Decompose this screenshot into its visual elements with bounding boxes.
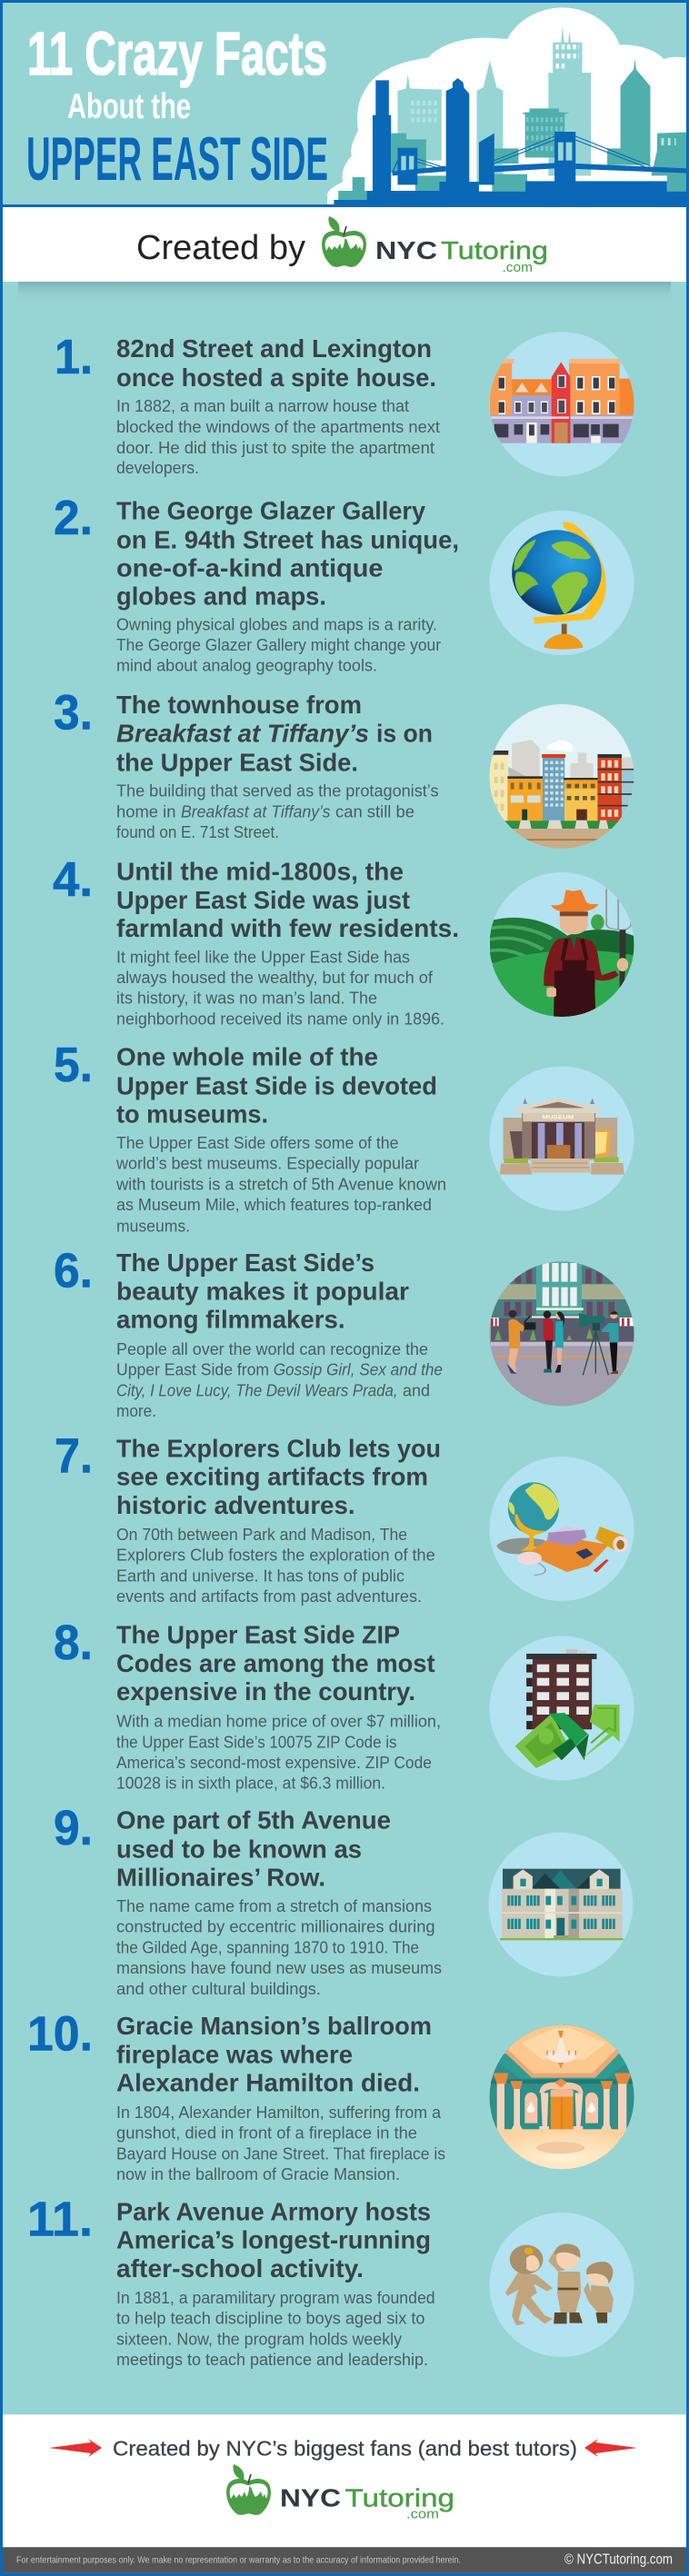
heading: to museums. bbox=[116, 1100, 268, 1129]
heading: America’s longest-running bbox=[116, 2225, 431, 2253]
heading: after-school activity. bbox=[116, 2254, 364, 2283]
heading bbox=[116, 857, 459, 942]
body text: The building that served as the protagonist’s bbox=[116, 781, 438, 801]
icon: building and money bbox=[489, 1636, 634, 1781]
body text bbox=[116, 947, 444, 1028]
heading bbox=[116, 1806, 391, 1892]
heading: historic adventures. bbox=[116, 1491, 355, 1519]
band shadow bbox=[18, 282, 671, 303]
heading: Breakfast at Tiffany’s bbox=[116, 720, 369, 748]
heading: on E. 94th Street has unique, bbox=[116, 525, 459, 553]
body text: museums. bbox=[116, 1216, 190, 1235]
body text: People all over the world can recognize the bbox=[116, 1339, 428, 1358]
fact 3 bbox=[54, 686, 634, 850]
title: Upper East Side: UPPER EAST SIDE bbox=[26, 124, 328, 194]
body text bbox=[116, 2103, 445, 2183]
logo wordmark: NYC bbox=[375, 236, 437, 264]
body text: blocked the windows of the apartments next bbox=[116, 417, 441, 436]
heading: expensive in the country. bbox=[116, 1677, 415, 1706]
heading: the Upper East Side. bbox=[116, 748, 358, 776]
body text: City, I Love Lucy, The Devil Wears Prada, bbox=[116, 1380, 398, 1399]
fact 1 bbox=[55, 330, 634, 477]
heading bbox=[116, 1620, 435, 1706]
body text: Gossip Girl, Sex and the bbox=[274, 1360, 443, 1379]
body text: It might feel like the Upper East Side has bbox=[116, 947, 410, 966]
number 3: 3. bbox=[54, 686, 93, 741]
heading: is on bbox=[376, 720, 433, 748]
heading bbox=[116, 2012, 432, 2097]
body text: neighborhood received its name only in 1896. bbox=[116, 1009, 444, 1028]
heading: Codes are among the most bbox=[116, 1649, 435, 1677]
body text: mind about analog geography tools. bbox=[116, 656, 377, 675]
body text bbox=[116, 614, 441, 675]
number 2: 2. bbox=[54, 491, 93, 545]
icon: farmer bbox=[489, 872, 634, 1018]
fact 4 bbox=[53, 852, 634, 1028]
body text: Earth and universe. It has tons of public bbox=[116, 1566, 404, 1585]
copyright: © NYCTutoring.com bbox=[564, 2552, 673, 2568]
icon: museum: MUSEUM bbox=[543, 1113, 574, 1120]
heading: Upper East Side is devoted bbox=[116, 1071, 437, 1099]
heading: one-of-a-kind antique bbox=[116, 553, 384, 582]
icon: brownstones bbox=[489, 704, 634, 850]
body text: Bayard House on Jane Street. That fireplace is bbox=[116, 2143, 445, 2163]
body text: Upper East Side from bbox=[116, 1360, 269, 1379]
heading bbox=[116, 2197, 431, 2283]
heading bbox=[116, 1434, 441, 1519]
footer tagline: Created by NYC’s biggest fans (and best tutors) bbox=[113, 2437, 577, 2461]
body text: as Museum Mile, which features top-ranked bbox=[116, 1195, 432, 1214]
logo wordmark: Tutoring bbox=[441, 236, 548, 264]
heading: farmland with few residents. bbox=[116, 914, 459, 942]
body text: The George Glazer Gallery might change your bbox=[116, 635, 441, 654]
body text: Breakfast at Tiffany’s bbox=[181, 801, 331, 821]
body text: always housed the wealthy, but for much of bbox=[116, 968, 434, 987]
number 4: 4. bbox=[53, 852, 93, 907]
fact 11 bbox=[27, 2193, 634, 2369]
heading: see exciting artifacts from bbox=[116, 1462, 428, 1490]
heading: One part of 5th Avenue bbox=[116, 1806, 391, 1835]
icon: ballroom bbox=[489, 2022, 636, 2176]
heading: Gracie Mansion’s ballroom bbox=[116, 2012, 432, 2040]
body text: and bbox=[403, 1380, 430, 1399]
body text: gunshot, died in front of a fireplace in the bbox=[116, 2123, 417, 2143]
body text: can still be bbox=[335, 801, 414, 821]
fact 10 bbox=[27, 2007, 636, 2183]
number 8: 8. bbox=[54, 1616, 93, 1670]
number 11: 11. bbox=[27, 2193, 93, 2247]
body text bbox=[116, 1712, 441, 1793]
body text: With a median home price of over $7 million, bbox=[116, 1712, 441, 1731]
title: 11 Crazy Facts: 11 Crazy Facts bbox=[27, 20, 327, 88]
heading: Upper East Side was just bbox=[116, 886, 410, 914]
footer logo wordmark bbox=[280, 2483, 454, 2522]
number 1: 1. bbox=[55, 330, 93, 384]
logo wordmark bbox=[375, 236, 548, 275]
body text bbox=[116, 2288, 435, 2369]
footer panel bbox=[3, 2414, 686, 2547]
heading bbox=[116, 334, 436, 392]
number 6: 6. bbox=[54, 1244, 93, 1298]
body text bbox=[116, 1339, 443, 1420]
icon: cadets bbox=[489, 2213, 634, 2357]
number 9: 9. bbox=[54, 1801, 93, 1855]
number 5: 5. bbox=[54, 1038, 93, 1092]
created by text: Created by bbox=[136, 229, 305, 267]
body text: with tourists is a stretch of 5th Avenue known bbox=[115, 1174, 446, 1193]
footer logo wordmark: NYC bbox=[280, 2483, 341, 2511]
body text bbox=[116, 396, 441, 477]
disclaimer text: For entertainment purposes only. We make no representation or warranty as to the accuracy of information provided herein. bbox=[16, 2555, 461, 2566]
body text: the Gilded Age, spanning 1870 to 1910. The bbox=[116, 1937, 419, 1956]
heading: Alexander Hamilton died. bbox=[116, 2069, 420, 2097]
body text: Explorers Club fosters the exploration of the bbox=[116, 1546, 435, 1565]
icon: apple logo bbox=[322, 216, 366, 267]
heading: Millionaires’ Row. bbox=[116, 1864, 325, 1892]
header banner bbox=[0, 0, 689, 207]
body text: to help teach discipline to boys aged six to bbox=[116, 2309, 425, 2328]
body text: developers. bbox=[116, 458, 199, 477]
icon: museum bbox=[489, 1067, 634, 1210]
body text: the Upper East Side’s 10075 ZIP Code is bbox=[116, 1732, 396, 1751]
disclaimer bar bbox=[0, 2547, 689, 2576]
top border bbox=[0, 0, 689, 3]
body text bbox=[116, 1896, 442, 1998]
body text: home in bbox=[116, 801, 176, 821]
fact 6 bbox=[54, 1244, 636, 1420]
body text: sixteen. Now, the program holds weekly bbox=[116, 2329, 403, 2348]
heading bbox=[116, 497, 459, 611]
heading: once hosted a spite house. bbox=[116, 363, 436, 392]
heading: The townhouse from bbox=[116, 691, 362, 719]
heading: The Upper East Side’s bbox=[116, 1248, 374, 1277]
footer logo wordmark: .com bbox=[406, 2507, 439, 2522]
fact 7 bbox=[55, 1429, 634, 1606]
heading: The Explorers Club lets you bbox=[116, 1434, 441, 1462]
body text: meetings to teach patience and leadership. bbox=[116, 2350, 428, 2369]
skyline illustration bbox=[327, 7, 689, 207]
body text: On 70th between Park and Madison, The bbox=[116, 1525, 407, 1544]
body text: The name came from a stretch of mansions bbox=[116, 1896, 432, 1915]
heading bbox=[116, 1248, 409, 1334]
body text: and other cultural buildings. bbox=[116, 1979, 321, 1998]
fact 5 bbox=[54, 1038, 634, 1235]
icon: mansion bbox=[489, 1832, 633, 1977]
arrow right bbox=[584, 2439, 637, 2457]
body text: door. He did this just to spite the apartment bbox=[116, 438, 435, 457]
logo wordmark: .com bbox=[502, 260, 533, 275]
bottom border bbox=[0, 2573, 689, 2576]
heading: fireplace was where bbox=[116, 2040, 353, 2068]
body text: found on E. 71st Street. bbox=[116, 822, 279, 841]
body text: The Upper East Side offers some of the bbox=[116, 1133, 398, 1152]
heading bbox=[116, 1043, 437, 1129]
heading: beauty makes it popular bbox=[116, 1277, 409, 1305]
heading: Park Avenue Armory hosts bbox=[116, 2197, 431, 2225]
created-by band bbox=[3, 207, 686, 303]
body text: Owning physical globes and maps is a rarity. bbox=[116, 614, 437, 633]
icon: townhouses bbox=[489, 332, 634, 476]
icon: globe bbox=[489, 511, 634, 655]
arrow left bbox=[49, 2439, 102, 2457]
body text: world’s best museums. Especially popular bbox=[115, 1154, 419, 1173]
body text bbox=[116, 1525, 435, 1606]
footer logo wordmark: Tutoring bbox=[345, 2483, 454, 2511]
heading: The Upper East Side ZIP bbox=[116, 1620, 400, 1648]
body text bbox=[116, 781, 438, 841]
fact 2 bbox=[54, 491, 634, 675]
body text: mansions have found new uses as museums bbox=[116, 1958, 442, 1977]
body text: America’s second-most expensive. ZIP Code bbox=[116, 1753, 432, 1772]
heading: One whole mile of the bbox=[116, 1043, 378, 1071]
body text: In 1804, Alexander Hamilton, suffering from a bbox=[116, 2103, 442, 2122]
title: About the: About the bbox=[67, 87, 191, 126]
body text: its history, it was no man’s land. The bbox=[116, 989, 377, 1008]
body text: more. bbox=[116, 1401, 156, 1420]
heading: used to be known as bbox=[116, 1835, 362, 1863]
fact 9 bbox=[54, 1801, 633, 1998]
body text: 10028 is in sixth place, at $6.3 million. bbox=[116, 1774, 385, 1793]
body text: In 1881, a paramilitary program was founded bbox=[116, 2288, 435, 2307]
body text: now in the ballroom of Gracie Mansion. bbox=[116, 2164, 400, 2183]
body text bbox=[115, 1133, 446, 1235]
number 10: 10. bbox=[27, 2007, 93, 2062]
body text: constructed by eccentric millionaires during bbox=[116, 1917, 435, 1936]
heading: globes and maps. bbox=[116, 582, 326, 611]
header bottom rule bbox=[0, 204, 689, 207]
body text: events and artifacts from past adventures. bbox=[116, 1586, 422, 1606]
heading: among filmmakers. bbox=[116, 1306, 345, 1334]
heading: The George Glazer Gallery bbox=[116, 497, 426, 525]
fact 8 bbox=[54, 1616, 634, 1793]
icon: film crew bbox=[489, 1254, 636, 1407]
number 7: 7. bbox=[55, 1429, 93, 1484]
body text: In 1882, a man built a narrow house that bbox=[116, 396, 410, 415]
heading bbox=[116, 691, 433, 776]
icon: apple logo bbox=[226, 2464, 271, 2515]
heading: 82nd Street and Lexington bbox=[116, 334, 432, 363]
heading: Until the mid-1800s, the bbox=[116, 857, 404, 885]
icon: explorer gear bbox=[489, 1457, 634, 1601]
